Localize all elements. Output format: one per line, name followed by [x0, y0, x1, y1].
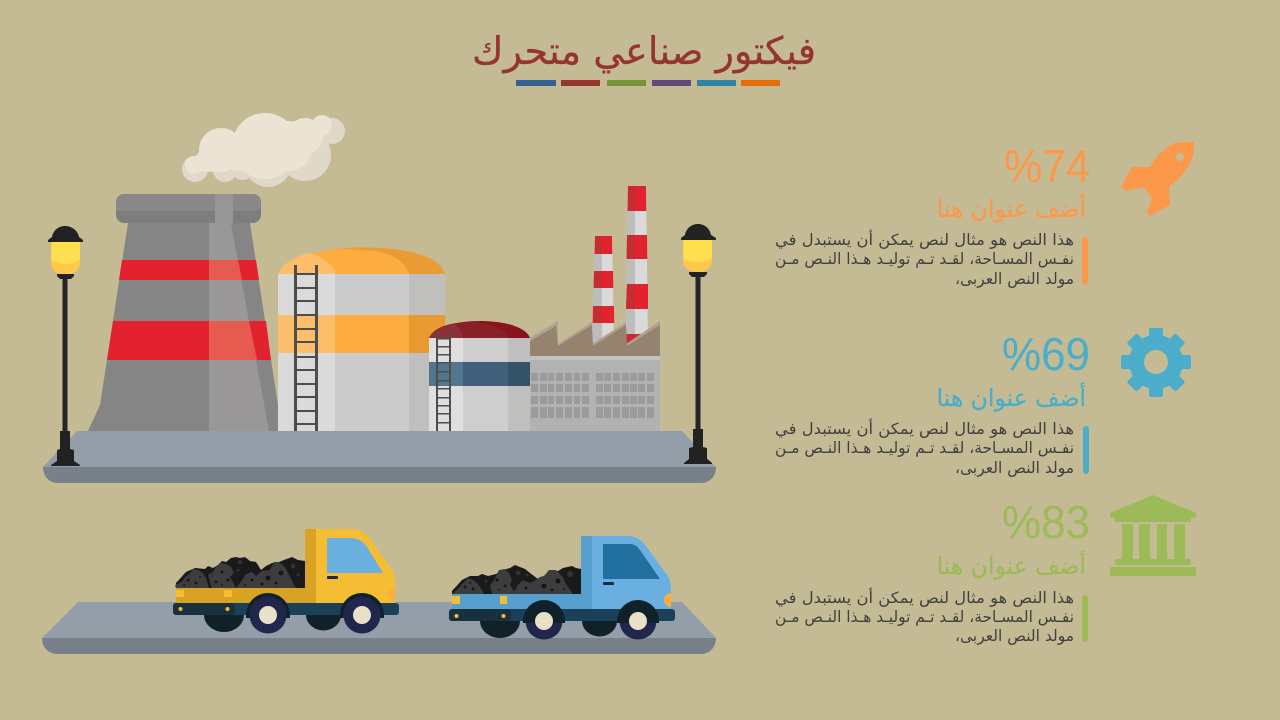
body text	[775, 418, 1074, 477]
body text	[775, 229, 1074, 288]
truck bed	[176, 588, 305, 603]
cab	[305, 529, 316, 603]
chimneys	[592, 186, 648, 345]
front wheels	[523, 600, 659, 640]
rear wheels	[480, 621, 617, 638]
ladder	[436, 332, 451, 431]
storage tank: blue band	[429, 321, 530, 431]
cooling tower	[88, 194, 290, 431]
body text: مولد النص العربى،	[955, 270, 1074, 288]
panel: road with trucks	[42, 529, 716, 654]
factory platform	[43, 431, 716, 483]
chassis	[449, 609, 675, 621]
accent bar	[1083, 426, 1089, 474]
front wheels	[246, 593, 384, 634]
panel: stat 83	[775, 495, 1196, 645]
rear wheels	[204, 615, 341, 632]
accent bar	[1082, 595, 1088, 642]
truck: yellow	[173, 529, 399, 634]
road	[42, 602, 716, 654]
heading: أضف عنوان هنا	[937, 551, 1086, 580]
body text: هذا النص هو مثال لنص يمكن أن يستبدل في	[775, 418, 1074, 439]
chassis	[173, 603, 399, 615]
body text: مولد النص العربى،	[955, 627, 1074, 645]
body text: هذا النص هو مثال لنص يمكن أن يستبدل في	[775, 229, 1074, 250]
icon: gear	[1121, 328, 1191, 397]
truck: blue	[449, 536, 675, 640]
body text: نفـس المسـاحة، لقـد تـم توليـد هـذا النـص مـن	[775, 250, 1074, 268]
title: فيكتور صناعي متحرك	[472, 29, 816, 74]
accent bar	[1082, 237, 1088, 285]
title colour bars	[516, 80, 780, 86]
heading: أضف عنوان هنا	[937, 194, 1086, 223]
percentage: %69	[1002, 328, 1090, 380]
cab	[581, 536, 592, 609]
icon: rocket	[1121, 142, 1194, 216]
panel: stat 74	[775, 140, 1194, 288]
panel: stat 69	[775, 328, 1191, 477]
ladder	[294, 265, 318, 431]
smoke cloud	[182, 113, 345, 187]
body text: هذا النص هو مثال لنص يمكن أن يستبدل في	[775, 587, 1074, 608]
body text: نفـس المسـاحة، لقـد تـم توليـد هـذا النـص مـن	[775, 439, 1074, 457]
coal load	[452, 565, 581, 594]
body text	[775, 587, 1074, 645]
street lamp: left	[48, 226, 83, 466]
heading: أضف عنوان هنا	[937, 383, 1086, 412]
icon: bank	[1110, 495, 1196, 576]
factory building	[530, 321, 660, 431]
body text: نفـس المسـاحة، لقـد تـم توليـد هـذا النـص مـن	[775, 608, 1074, 626]
truck bed	[452, 594, 581, 609]
body text: مولد النص العربى،	[955, 459, 1074, 477]
coal load	[175, 557, 305, 588]
street lamp: right	[681, 224, 716, 464]
panel: factory scene	[43, 113, 716, 483]
percentage: %74	[1004, 140, 1090, 192]
percentage: %83	[1002, 496, 1090, 548]
factory windows	[531, 373, 654, 418]
storage tank: orange	[278, 247, 445, 431]
